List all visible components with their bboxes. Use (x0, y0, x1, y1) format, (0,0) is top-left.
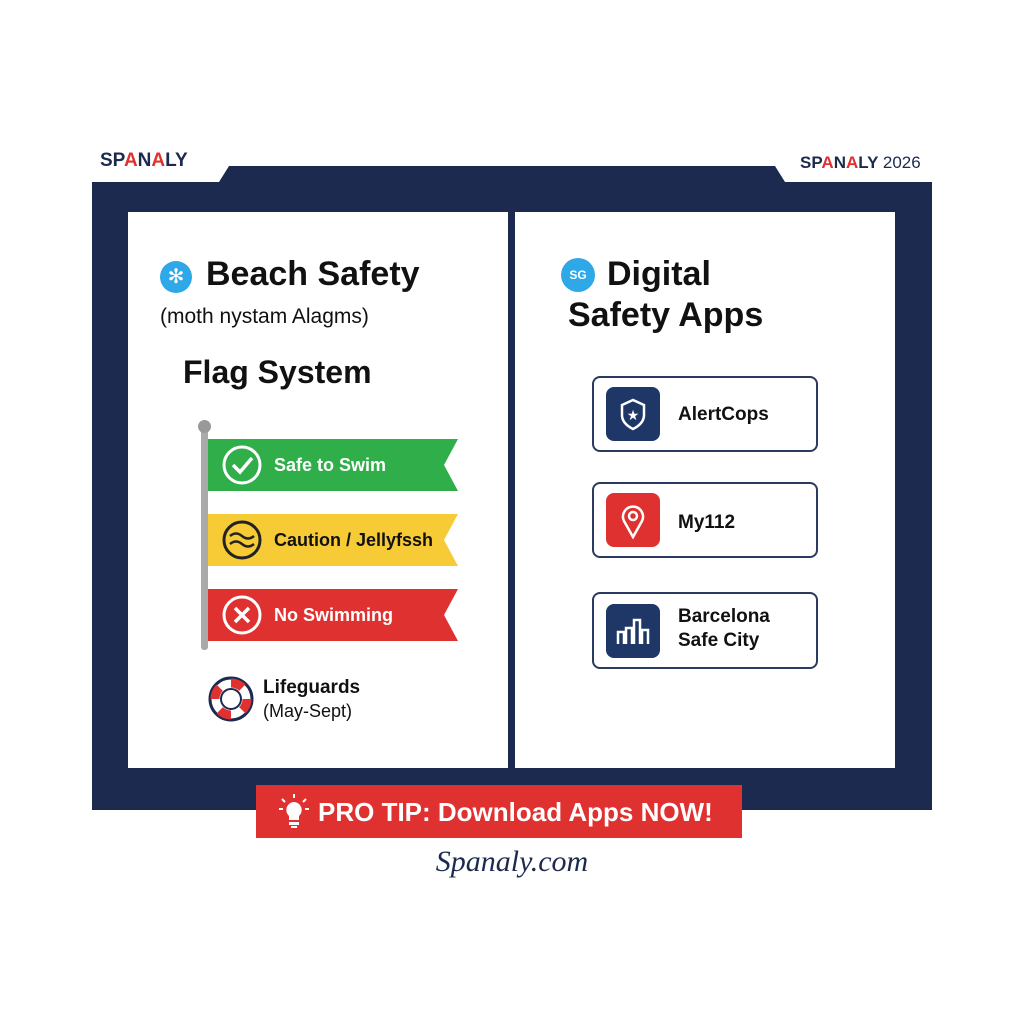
icon: palm: ✻ (168, 266, 184, 288)
icon: sg (561, 258, 595, 292)
app alertcops (592, 376, 818, 452)
flag yellow (208, 514, 458, 566)
flag red (208, 589, 458, 641)
logo right: SPANALY 2026 (800, 153, 921, 172)
icon: palm (160, 261, 192, 293)
app barcelona (592, 592, 818, 669)
icon: sg: SG (569, 268, 587, 282)
flag green: Safe to Swim (274, 455, 386, 475)
panel: beach safety (128, 212, 508, 768)
app alertcops: ★ (627, 407, 639, 423)
icon: bulb (279, 794, 309, 828)
flag green (208, 439, 458, 491)
flag yellow: Caution / Jellyfssh (274, 530, 433, 550)
app barcelona: Barcelona (678, 606, 770, 627)
subtitle: (moth nystam Alagms) (160, 305, 369, 328)
flag red: No Swimming (274, 605, 393, 625)
pro tip banner: PRO TIP: Download Apps NOW! (318, 797, 713, 827)
pro tip banner (256, 785, 742, 838)
lifeguards: Lifeguards (263, 677, 360, 698)
icon: lifebuoy (208, 676, 254, 722)
app my112 (592, 482, 818, 558)
heading digital: Digital (607, 255, 711, 293)
flag pole (201, 424, 208, 650)
app alertcops: AlertCops (678, 404, 769, 425)
logo left: SPANALY (100, 150, 188, 171)
app my112: My112 (678, 512, 735, 533)
panel: digital apps: Safety Apps (568, 296, 763, 334)
heading flag system: Flag System (183, 354, 372, 390)
lifeguards: (May-Sept) (263, 701, 352, 721)
lifeguards (208, 676, 360, 722)
heading beach: Beach Safety (206, 255, 420, 293)
panel: digital apps (515, 212, 895, 768)
app barcelona: Safe City (678, 630, 759, 651)
footer url: Spanaly.com (436, 845, 588, 878)
